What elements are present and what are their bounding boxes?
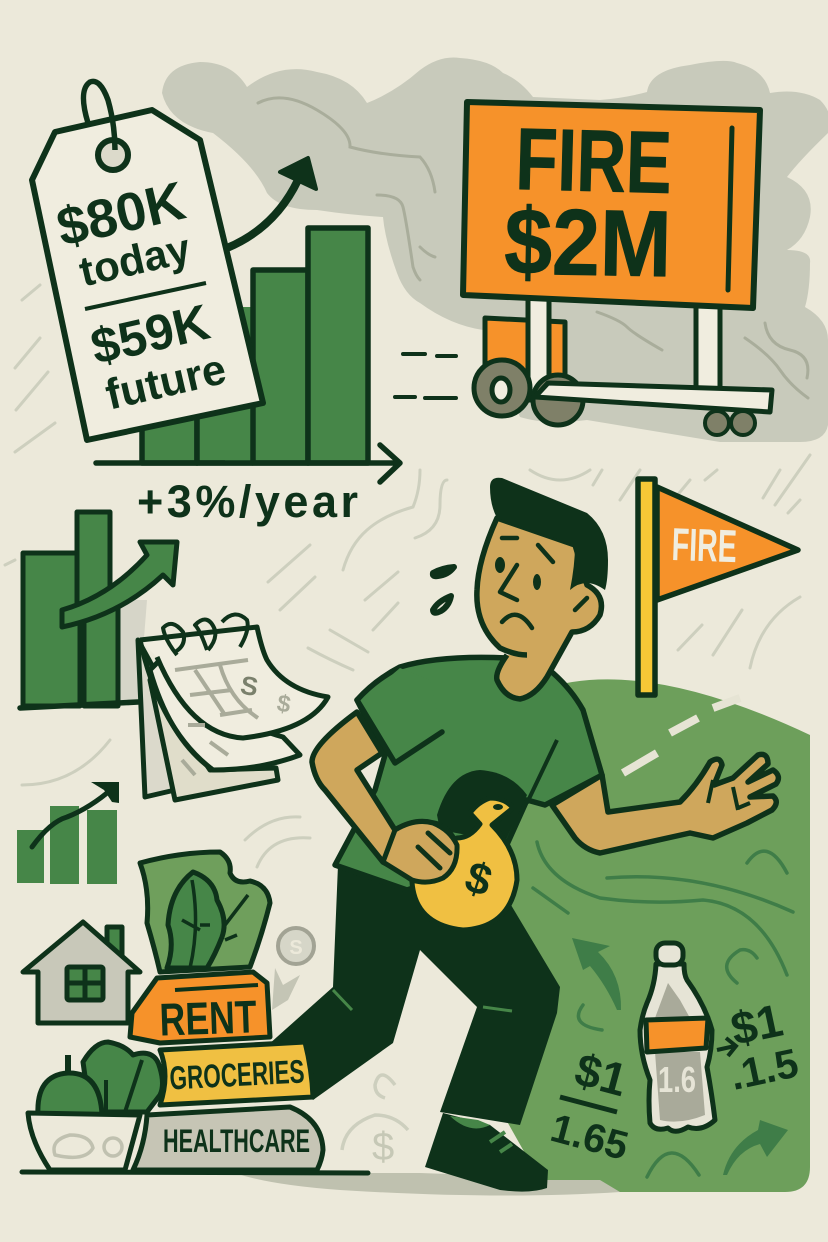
price tag: today: [75, 224, 195, 295]
torso: [335, 657, 602, 890]
book: groceries: [160, 1042, 313, 1105]
shrinkflation prices: .1.5: [726, 1040, 802, 1099]
house icon: [23, 922, 140, 1023]
face: [500, 538, 587, 628]
smoke cloud: [162, 58, 828, 442]
price tag: $59K: [86, 294, 215, 375]
FIRE sign on wheels: $2M: [504, 189, 672, 296]
price tag: future: [101, 345, 231, 419]
book: rent: [130, 972, 270, 1046]
sleeve: [360, 668, 442, 763]
book: healthcare: HEALTHCARE: [163, 1123, 310, 1159]
right arm: [552, 754, 778, 853]
bar chart: rising costs: [96, 158, 400, 482]
shirt opening: [437, 770, 527, 842]
lettuce: [140, 852, 270, 972]
coin with shadow: S: [289, 937, 303, 959]
money bag: [412, 798, 517, 930]
shrinkflation prices: [546, 994, 802, 1169]
price tag: $80K: [51, 171, 191, 258]
bowl of vegetables: [28, 1042, 162, 1170]
motion dashes: [395, 354, 456, 398]
price tag: [32, 81, 263, 440]
small bar chart with arrow: [20, 512, 177, 708]
soda bottle: 1.6: [658, 1059, 696, 1100]
ground line: [22, 1172, 368, 1173]
calendar: [138, 614, 328, 800]
ground shadow: [235, 1173, 620, 1196]
calendar: S: [238, 670, 261, 702]
left arm gap: [357, 755, 382, 785]
left arm: [312, 712, 457, 882]
label: +3%/year: +3%/year: [137, 476, 358, 527]
calendar: $: [275, 690, 293, 719]
book: healthcare: [133, 1107, 323, 1170]
hair: [490, 478, 608, 590]
faint dollar sketches: [342, 1075, 408, 1169]
head: [477, 518, 601, 699]
shrinkflation prices: $1: [570, 1043, 633, 1106]
person: [268, 478, 778, 1192]
FIRE sign on wheels: FIRE: [515, 109, 673, 212]
hand on bag: [383, 822, 457, 882]
flag: FIRE: [671, 518, 738, 572]
flag: [638, 479, 798, 695]
book: rent: RENT: [159, 990, 257, 1046]
soda bottle: [640, 943, 715, 1131]
shrinkflation prices: 1.65: [546, 1106, 633, 1169]
sweat drops: [433, 567, 454, 613]
faint dollar sketches: $: [372, 1125, 394, 1169]
person: $: [459, 852, 498, 906]
shrinkflation prices: $1: [726, 994, 787, 1055]
small bar chart lower: [17, 782, 119, 884]
green hill: [495, 679, 810, 1192]
coin with shadow: [272, 928, 314, 1010]
FIRE sign on wheels: [463, 102, 772, 435]
trousers: [268, 865, 560, 1125]
shoe: [425, 1113, 548, 1192]
book: groceries: GROCERIES: [169, 1052, 305, 1096]
